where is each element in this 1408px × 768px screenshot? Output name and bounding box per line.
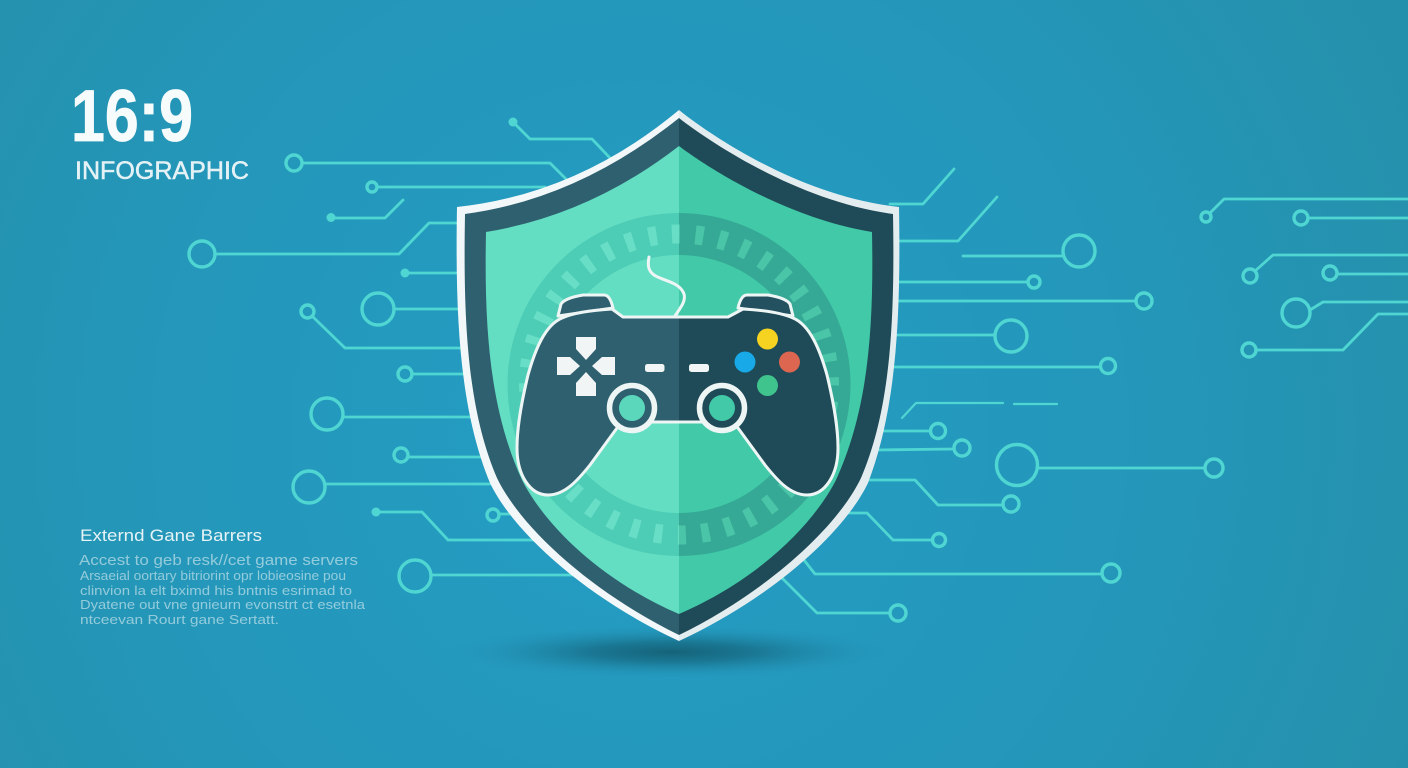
controller cable (648, 257, 684, 316)
text block body: Dyatene out vne gnieurn evonstrt ct esetnla (80, 597, 366, 612)
action buttons (734, 328, 800, 396)
game controller (517, 257, 838, 495)
text block body: ntceevan Rourt gane Sertatt. (80, 612, 279, 627)
shield white border (457, 110, 901, 641)
d-pad (557, 337, 615, 396)
right thumbstick (700, 386, 744, 430)
start and select buttons (645, 364, 709, 372)
text block body: Accest to geb resk//cet game servers (79, 552, 358, 569)
circuit lines: far right (1201, 199, 1408, 357)
shield drop shadow (444, 625, 900, 679)
text block body: clinvion la elt bximd his bntnis esrimad to (80, 583, 352, 598)
subtitle: INFOGRAPHIC: INFOGRAPHIC (75, 157, 249, 185)
left thumbstick (610, 386, 654, 430)
shield (457, 110, 901, 641)
circular dial (508, 213, 850, 556)
circuit lines: left side (189, 118, 610, 592)
circuit lines: right side of shield (782, 169, 1223, 621)
text block: external game barriers (79, 527, 366, 627)
text block body: Arsaeial oortary bitriorint opr lobieosine pou (80, 568, 346, 583)
controller bumpers (558, 295, 793, 316)
text block heading: Externd Gane Barrers (80, 527, 262, 545)
controller body (517, 309, 838, 495)
shield dark band (465, 118, 893, 635)
text block body (79, 552, 366, 627)
title: 16:9: 16:9 (71, 76, 193, 157)
shield green face (486, 146, 872, 614)
